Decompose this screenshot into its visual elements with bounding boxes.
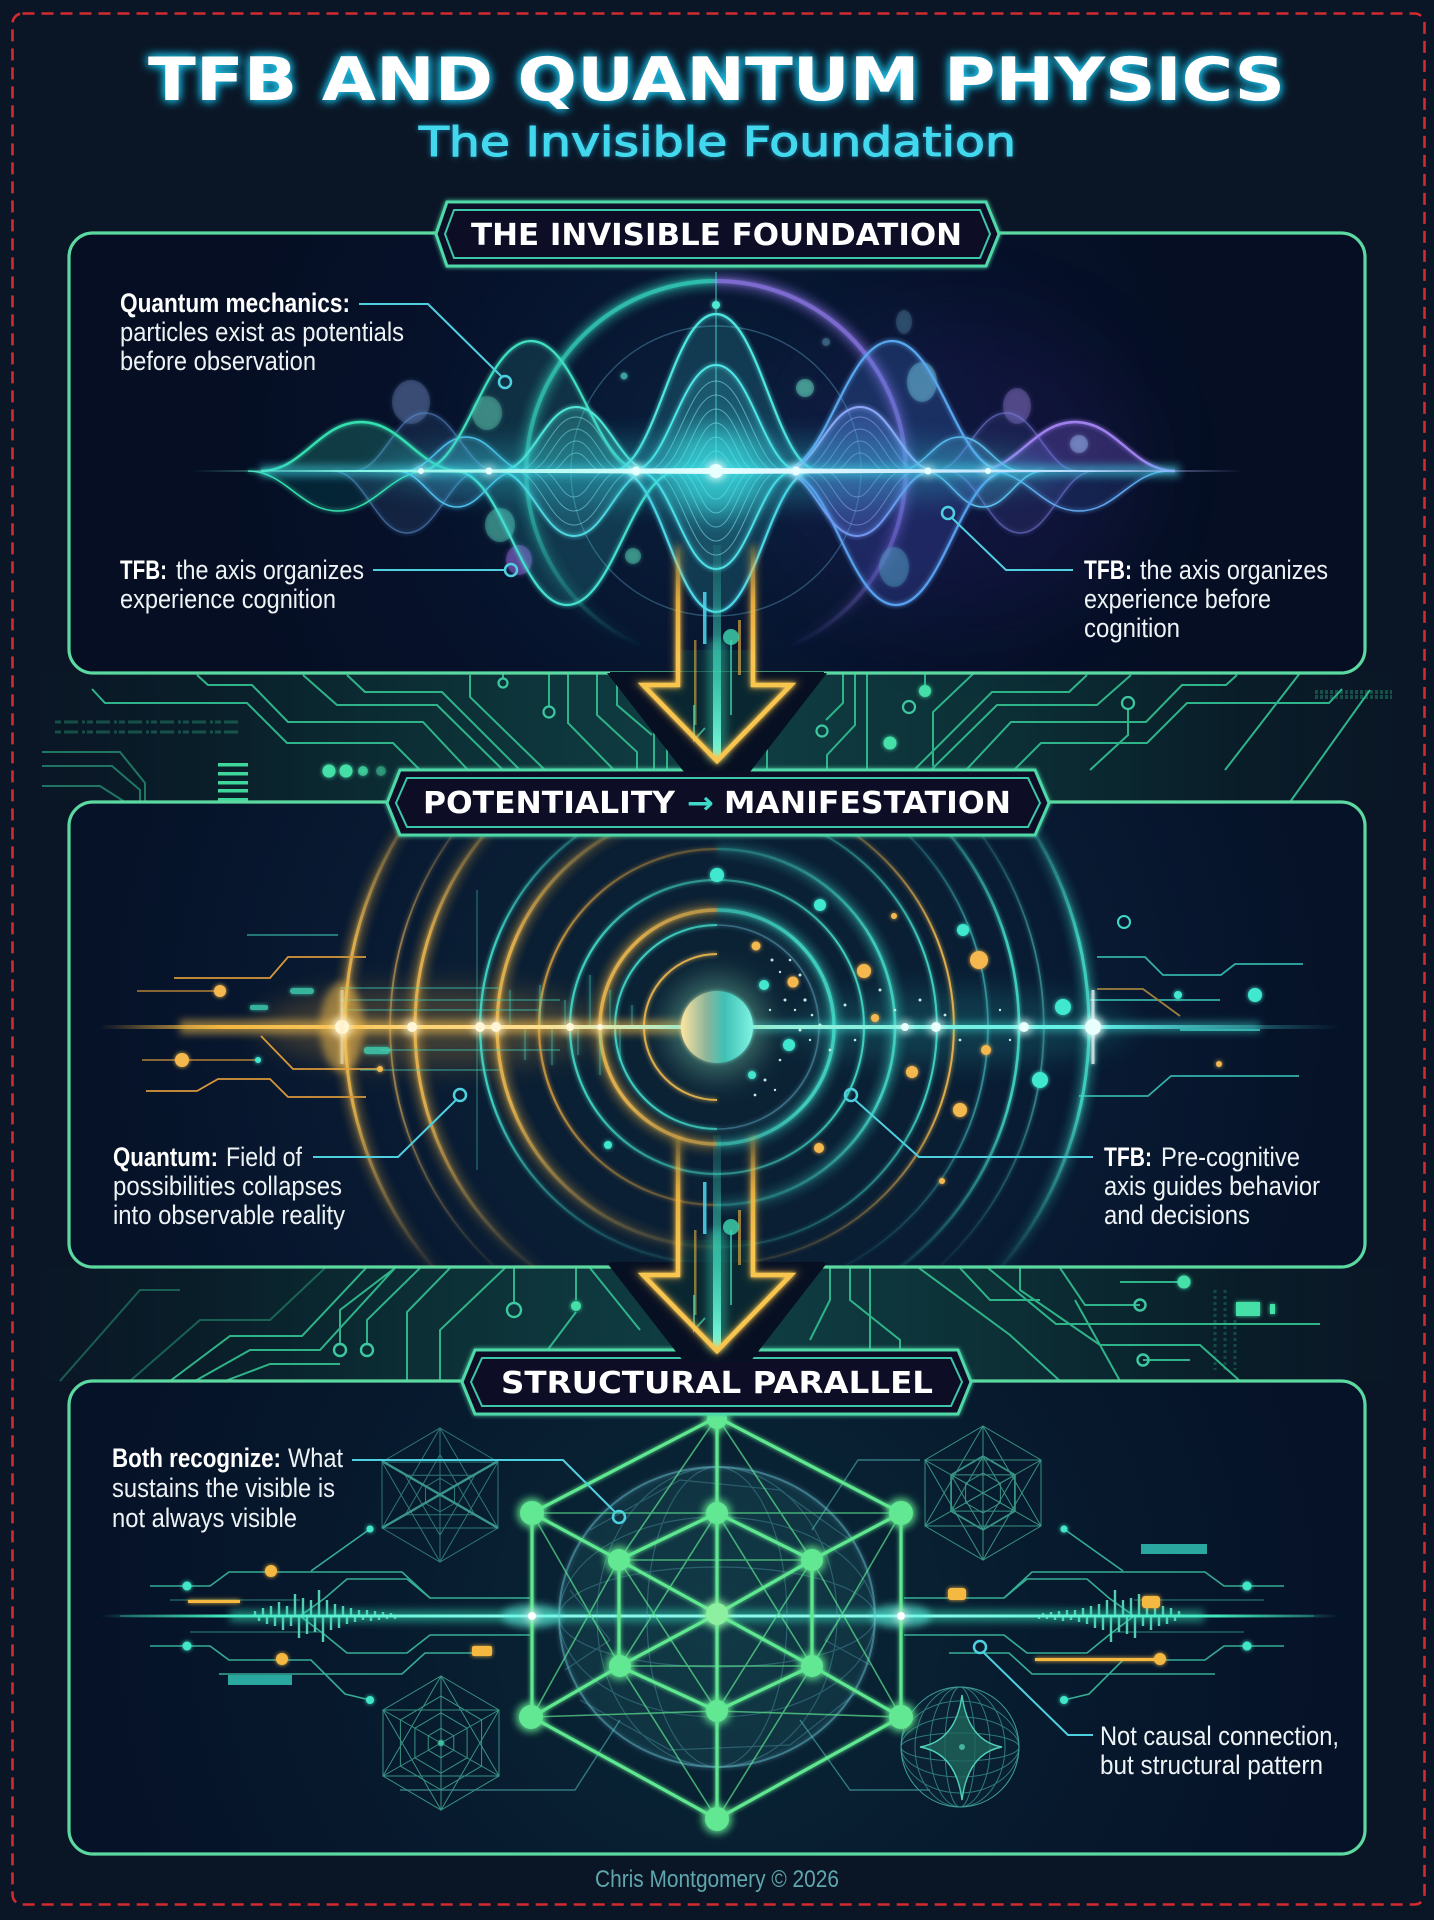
callout: both recognize: not always visible — [112, 1503, 297, 1533]
callout: TFB pre-cognitive: axis guides behavior — [1104, 1171, 1320, 1201]
particle field — [175, 868, 1262, 1184]
spike cluster near centre — [510, 975, 632, 1075]
arrow: foundation to manifestation — [607, 545, 827, 772]
callout: TFB right: the axis organizes — [1140, 555, 1328, 585]
title: TFB AND QUANTUM PHYSICS — [148, 45, 1285, 115]
callout: quantum mechanics: particles exist as potentials — [120, 317, 404, 347]
side circuits and waveform left — [120, 1529, 555, 1700]
callout: TFB pre-cognitive — [845, 1089, 1320, 1230]
banner title: STRUCTURAL PARALLEL — [501, 1366, 933, 1401]
axis — [190, 427, 1244, 515]
banner: potentiality to manifestation — [387, 770, 1049, 835]
callout: quantum mechanics: before observation — [120, 346, 316, 376]
hollow ring marker — [1118, 916, 1130, 928]
banner title: THE INVISIBLE FOUNDATION — [471, 218, 962, 253]
thin leader lines — [400, 1460, 930, 1790]
callout: quantum field: Field of — [226, 1142, 302, 1172]
central orb — [667, 977, 767, 1077]
callout: both recognize: What — [288, 1443, 343, 1473]
mid lobes with contour lines — [514, 381, 920, 555]
left traces and streaks — [137, 957, 380, 1097]
callout: TFB right: experience before — [1084, 584, 1271, 614]
banner title: → — [687, 786, 714, 821]
subtitle: The Invisible Foundation — [418, 118, 1016, 166]
callout: TFB left: the axis organizes — [176, 555, 364, 585]
callout: both recognize: sustains the visible is — [112, 1473, 335, 1503]
banner title: POTENTIALITY — [423, 786, 676, 821]
callout: TFB left — [120, 555, 517, 614]
right traces — [1079, 957, 1303, 1096]
status dots — [182, 1526, 1252, 1704]
callout: TFB right: TFB: — [1084, 555, 1132, 585]
icon: web hexagon — [383, 1676, 499, 1810]
callout: TFB right — [942, 507, 1328, 643]
back lobes — [248, 314, 1175, 612]
flare nodes — [502, 1604, 931, 1628]
callout: both recognize: Both recognize: — [112, 1443, 281, 1473]
big lobes — [419, 341, 643, 471]
banner title: MANIFESTATION — [724, 786, 1011, 821]
callout: TFB pre-cognitive: TFB: — [1104, 1142, 1152, 1172]
circuit traces: upper connector — [42, 673, 1392, 802]
callout: quantum field: Quantum: — [113, 1142, 218, 1172]
halo arcs — [526, 272, 906, 645]
axis beam — [100, 1614, 1340, 1618]
callout: quantum field: into observable reality — [113, 1200, 345, 1230]
callout: quantum mechanics — [120, 288, 511, 388]
panel: potentiality to manifestation — [67, 800, 1367, 1269]
banner: structural parallel — [462, 1350, 971, 1414]
panel: the invisible foundation — [69, 233, 1365, 673]
callout: TFB pre-cognitive: and decisions — [1104, 1200, 1250, 1230]
arrow: manifestation to parallel — [607, 1135, 827, 1362]
concentric rings — [104, 828, 1330, 1267]
icon: star hexagon — [382, 1428, 498, 1562]
callout: quantum field — [113, 1089, 466, 1230]
callout: quantum field: possibilities collapses — [113, 1171, 342, 1201]
banner title — [423, 786, 1011, 821]
icon: nested hexagon — [925, 1426, 1041, 1560]
callout: not causal: but structural pattern — [1100, 1750, 1323, 1780]
callout: not causal — [974, 1641, 1339, 1780]
bokeh — [392, 310, 1088, 587]
wave diagram — [190, 272, 1244, 645]
icon: wire sphere with star — [901, 1687, 1019, 1807]
callout: quantum mechanics: Quantum mechanics: — [120, 288, 350, 318]
circuit traces: lower connector — [60, 1268, 1320, 1381]
panel: structural parallel — [69, 1381, 1365, 1854]
callout: TFB right: cognition — [1084, 613, 1180, 643]
banner: the invisible foundation — [436, 202, 999, 266]
callout: not causal: Not causal connection, — [1100, 1721, 1339, 1751]
network: edges and nodes — [519, 1409, 913, 1831]
callout: TFB pre-cognitive: Pre-cognitive — [1161, 1142, 1300, 1172]
axis beam — [100, 982, 1340, 1072]
wire sphere — [559, 1467, 875, 1767]
callout: TFB left: experience cognition — [120, 584, 336, 614]
callout: TFB left: TFB: — [120, 555, 167, 585]
callout: both recognize — [112, 1443, 625, 1533]
footer credit: Chris Montgomery © 2026 — [595, 1866, 839, 1893]
side circuits and waveform right — [879, 1529, 1314, 1700]
